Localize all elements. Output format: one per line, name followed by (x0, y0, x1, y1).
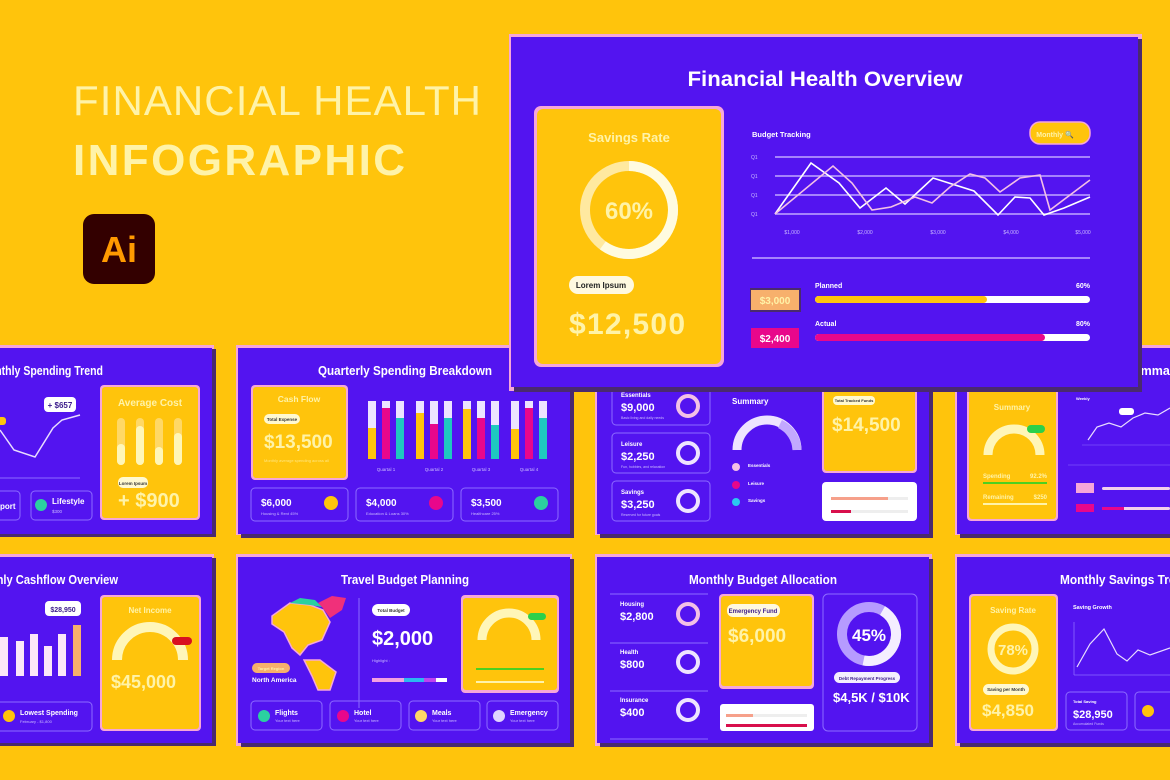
line chart: budget tracking (751, 122, 1091, 258)
panel: monthly budget allocation: $400 (620, 707, 644, 719)
travel categories: Flights (275, 710, 298, 717)
panel: monthly savings trend: $28,950 (1073, 709, 1113, 721)
progress bars: planned vs actual: $2,400 (760, 334, 791, 345)
card: saving rate: $4,850 (982, 701, 1034, 720)
panel: monthly cashflow overview (0, 554, 216, 746)
panel: budget summary (partially hidden): Reserved for future goals (621, 513, 661, 517)
card: saving rate (969, 594, 1058, 731)
progress bars: planned vs actual (750, 283, 1091, 348)
card: average cost: + $900 (118, 490, 180, 512)
gauge: summary: Essentials (748, 463, 771, 468)
panel: monthly budget allocation: Monthly Budget Allocation (689, 573, 837, 587)
panel: monthly savings trend: Accumulated Funds (1073, 722, 1104, 726)
stat boxes: $4,000 (366, 498, 397, 509)
bar chart: quarters: Quartal 4 (520, 467, 539, 472)
icon: Adobe Illustrator: Ai (101, 229, 137, 270)
line chart: budget tracking: Q1 (751, 193, 758, 199)
panel: financial summary (cut): Remaining (983, 495, 1014, 501)
donut: debt repayment: $4,5K / $10K (833, 690, 910, 705)
panel: monthly cashflow overview: February - $1,800 (20, 719, 53, 724)
card: saving rate: Saving per Month (987, 687, 1025, 692)
title: INFOGRAPHIC (73, 136, 405, 185)
panel: financial summary (cut): Summary (994, 403, 1031, 412)
line chart: budget tracking: $4,000 (1003, 230, 1019, 236)
card: cash flow (251, 385, 348, 480)
line chart: budget tracking: Q1 (751, 155, 758, 161)
card: accommodation gauge (461, 595, 559, 693)
card: net income (100, 595, 201, 731)
donut: debt repayment (823, 594, 917, 731)
panel: monthly cashflow overview: $28,950 (50, 607, 76, 614)
panel: budget summary (partially hidden) (595, 345, 933, 538)
heading: Financial Health Overview (688, 68, 963, 91)
card: average cost: Lorem Ipsum (119, 481, 147, 486)
panel: monthly budget allocation (595, 554, 933, 747)
panel: monthly savings trend: Total Saving (1073, 699, 1097, 704)
progress bars: planned vs actual: $3,000 (760, 296, 791, 307)
card: total tracked funds: $14,500 (832, 415, 901, 436)
travel categories (251, 701, 558, 730)
panel: travel budget planning (236, 554, 574, 747)
card: net income: $45,000 (111, 672, 176, 692)
panel: travel budget planning: Travel Budget Planning (341, 573, 469, 587)
bar chart: quarters (368, 401, 547, 472)
panel: budget summary (partially hidden): $9,000 (621, 402, 655, 414)
stat boxes: Education & Loans 30% (366, 511, 409, 516)
card: emergency fund: $6,000 (728, 626, 786, 647)
card: cash flow: Total Expense (267, 417, 298, 422)
panel: budget summary (partially hidden): Leisure (621, 442, 643, 448)
panel: budget summary (partially hidden): $2,250 (621, 451, 655, 463)
panel: monthly spending trend: port (0, 502, 16, 511)
gauge: summary: Summary (732, 397, 769, 406)
panel: monthly budget allocation: $2,800 (620, 611, 654, 623)
line chart: budget tracking: $2,000 (857, 230, 873, 236)
bar chart: quarters: Quartal 2 (425, 467, 444, 472)
panel: monthly spending trend: $300 (52, 509, 63, 514)
donut: debt repayment: Debt Repayment Progress (839, 676, 896, 681)
line chart: budget tracking: Monthly 🔍 (1036, 130, 1074, 139)
panel: monthly spending trend: Lifestyle (52, 497, 85, 506)
panel: financial summary (cut): Spending (983, 474, 1011, 480)
panel: monthly budget allocation: Health (620, 650, 639, 656)
card: savings rate: Savings Rate (588, 130, 670, 145)
card: savings rate: $12,500 (569, 308, 685, 341)
map: americas (272, 596, 346, 690)
panel: monthly savings trend: Saving Growth (1073, 605, 1112, 611)
panel: budget summary (partially hidden): Essentials (621, 393, 651, 399)
progress bars: planned vs actual: 80% (1076, 321, 1091, 328)
panel: travel budget planning: Highlight : (372, 658, 390, 663)
panel: monthly budget allocation: $800 (620, 659, 644, 671)
stat boxes (251, 488, 558, 521)
icon: Adobe Illustrator (83, 214, 155, 284)
card: net income: Net Income (128, 606, 172, 615)
gauge: summary: Savings (748, 498, 766, 503)
panel: monthly savings trend (955, 554, 1170, 747)
panel: financial summary (cut): $250 (1034, 495, 1048, 501)
card: total tracked funds: Total Tracked Funds (835, 398, 874, 403)
panel: travel budget planning: Total Budget (377, 608, 405, 613)
title: FINANCIAL HEALTH (73, 77, 481, 124)
gauge: summary: Leisure (748, 481, 765, 486)
travel categories: Your text here (275, 718, 301, 723)
card: average cost: Average Cost (118, 398, 183, 409)
line chart: budget tracking: Q1 (751, 174, 758, 180)
line chart: budget tracking: $1,000 (784, 230, 800, 236)
travel categories: Emergency (510, 710, 548, 717)
panel: monthly cashflow overview: Lowest Spending (20, 710, 78, 717)
donut: debt repayment: 45% (852, 626, 886, 645)
card: saving rate: Saving Rate (990, 606, 1036, 615)
card: cash flow: $13,500 (264, 432, 333, 453)
title (73, 77, 481, 185)
panel: monthly budget allocation: Housing (620, 602, 644, 608)
panel: budget summary (partially hidden): Savings (621, 490, 645, 496)
panel: monthly budget allocation: Insurance (620, 698, 649, 704)
panel: financial summary (cut): Weekly (1076, 396, 1090, 401)
travel categories: Your text here (432, 718, 458, 723)
line chart: budget tracking: Budget Tracking (752, 130, 811, 139)
bar chart: quarters: Quartal 1 (377, 467, 396, 472)
panel: financial summary (cut): 92.2% (1030, 474, 1048, 480)
panel: travel budget planning: Target Region (258, 666, 285, 671)
progress bars: planned vs actual: Actual (815, 321, 836, 328)
travel categories: Meals (432, 710, 452, 717)
card: cash flow: Monthly average spending across all (264, 458, 329, 463)
card: total tracked funds (822, 388, 917, 521)
progress bars: planned vs actual: Planned (815, 283, 842, 290)
travel categories: Your text here (510, 718, 536, 723)
line chart: budget tracking: Q1 (751, 212, 758, 218)
card: savings rate: Lorem Ipsum (576, 281, 626, 290)
card: savings rate: 60% (605, 198, 653, 225)
line chart: budget tracking: $3,000 (930, 230, 946, 236)
stat boxes: Healthcare 25% (471, 511, 500, 516)
panel: financial health overview (main) (509, 34, 1142, 392)
stat boxes: $6,000 (261, 498, 292, 509)
stat boxes: Housing & Rent 45% (261, 511, 299, 516)
panel: travel budget planning: North America (252, 677, 297, 684)
stat boxes: $3,500 (471, 498, 502, 509)
travel categories: Hotel (354, 710, 372, 717)
progress bars: planned vs actual: 60% (1076, 283, 1091, 290)
panel: budget summary (partially hidden): Basic living and daily needs (621, 416, 664, 420)
travel categories: Your text here (354, 718, 380, 723)
card: emergency fund: Emergency Fund (729, 609, 778, 615)
card: emergency fund (719, 594, 814, 731)
card: savings rate (534, 106, 724, 367)
card: saving rate: 78% (998, 642, 1028, 659)
panel: budget summary (partially hidden): $3,250 (621, 499, 655, 511)
panel: monthly spending trend: + $657 (48, 401, 73, 410)
panel: monthly spending trend (0, 345, 216, 537)
panel: travel budget planning: $2,000 (372, 628, 433, 650)
panel: budget summary (partially hidden): Fun, hobbies, and relaxation (621, 465, 665, 469)
bar chart: quarters: Quartal 3 (472, 467, 491, 472)
card: average cost (100, 385, 200, 520)
panel: quarterly spending breakdown (236, 345, 574, 538)
card: cash flow: Cash Flow (278, 394, 321, 404)
line chart: budget tracking: $5,000 (1075, 230, 1091, 236)
gauge: summary (732, 397, 797, 506)
panel: quarterly spending breakdown: Quarterly Spending Breakdown (318, 364, 492, 378)
panel: financial summary (cut) (955, 345, 1170, 538)
